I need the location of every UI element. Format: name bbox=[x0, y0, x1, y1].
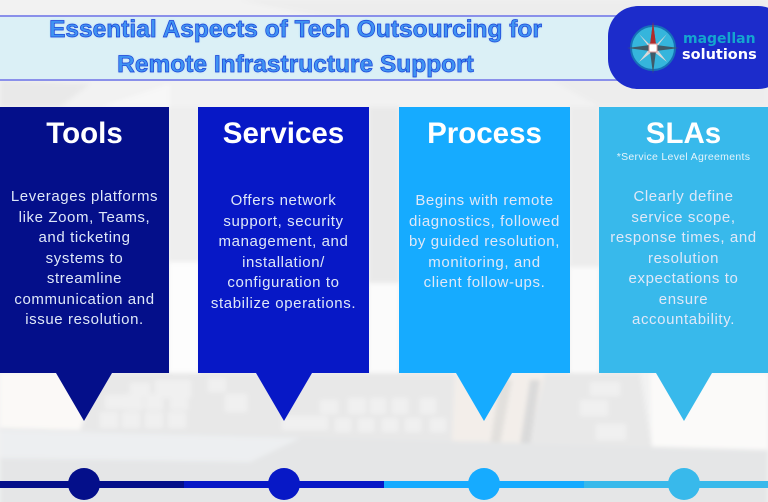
timeline bbox=[0, 468, 768, 500]
arrow: slas bbox=[656, 373, 712, 421]
heading: slas: SLAs bbox=[646, 117, 721, 150]
text: services: management, and bbox=[219, 233, 348, 250]
text: tools: like Zoom, Teams, bbox=[19, 208, 150, 226]
text: tools bbox=[11, 188, 158, 328]
text: slas: accountability. bbox=[632, 311, 735, 328]
logo text magellan: magellan bbox=[683, 31, 756, 47]
arrow: process bbox=[456, 373, 512, 421]
text: services bbox=[211, 192, 356, 312]
text: process: Begins with remote bbox=[415, 192, 554, 209]
text: tools: systems to bbox=[46, 250, 123, 266]
text: slas: service scope, bbox=[631, 208, 736, 226]
logo badge bbox=[608, 6, 768, 89]
text: tools: communication and bbox=[14, 290, 155, 308]
arrow: tools bbox=[56, 373, 112, 421]
text: process bbox=[409, 192, 560, 291]
title line 2: Remote Infrastructure Support bbox=[117, 51, 474, 78]
text: tools: streamline bbox=[47, 270, 122, 287]
heading: process: Process bbox=[427, 117, 542, 150]
panel: slas bbox=[599, 107, 768, 373]
icon: compass bbox=[628, 22, 678, 74]
title line 1: Essential Aspects of Tech Outsourcing for bbox=[49, 16, 542, 43]
text: slas bbox=[610, 188, 757, 328]
title banner bbox=[0, 15, 640, 81]
text: process: client follow-ups. bbox=[424, 274, 545, 291]
text: tools: issue resolution. bbox=[25, 311, 144, 328]
panel: process bbox=[399, 107, 570, 373]
note: slas: *Service Level Agreements bbox=[617, 151, 750, 163]
text: slas: resolution bbox=[648, 250, 719, 266]
panel: tools bbox=[0, 107, 169, 373]
text: services: installation/ bbox=[242, 254, 325, 270]
text: slas: expectations to bbox=[629, 270, 738, 287]
text: process: by guided resolution, bbox=[409, 233, 560, 250]
text: tools: Leverages platforms bbox=[11, 188, 158, 205]
text: process: monitoring, and bbox=[428, 254, 541, 270]
text: services: support, security bbox=[223, 212, 344, 230]
text: services: Offers network bbox=[231, 192, 336, 209]
text: process: diagnostics, followed bbox=[409, 212, 560, 230]
panel: services bbox=[198, 107, 369, 373]
text: slas: Clearly define bbox=[633, 188, 734, 205]
text: services: stabilize operations. bbox=[211, 294, 356, 312]
text: services: configuration to bbox=[227, 274, 340, 291]
heading: tools: Tools bbox=[46, 117, 123, 150]
text: slas: response times, and bbox=[610, 229, 757, 246]
text: slas: ensure bbox=[659, 290, 708, 308]
heading: services: Services bbox=[223, 117, 344, 150]
arrow: services bbox=[256, 373, 312, 421]
text: tools: and ticketing bbox=[38, 229, 131, 246]
logo text solutions: solutions bbox=[682, 47, 757, 63]
